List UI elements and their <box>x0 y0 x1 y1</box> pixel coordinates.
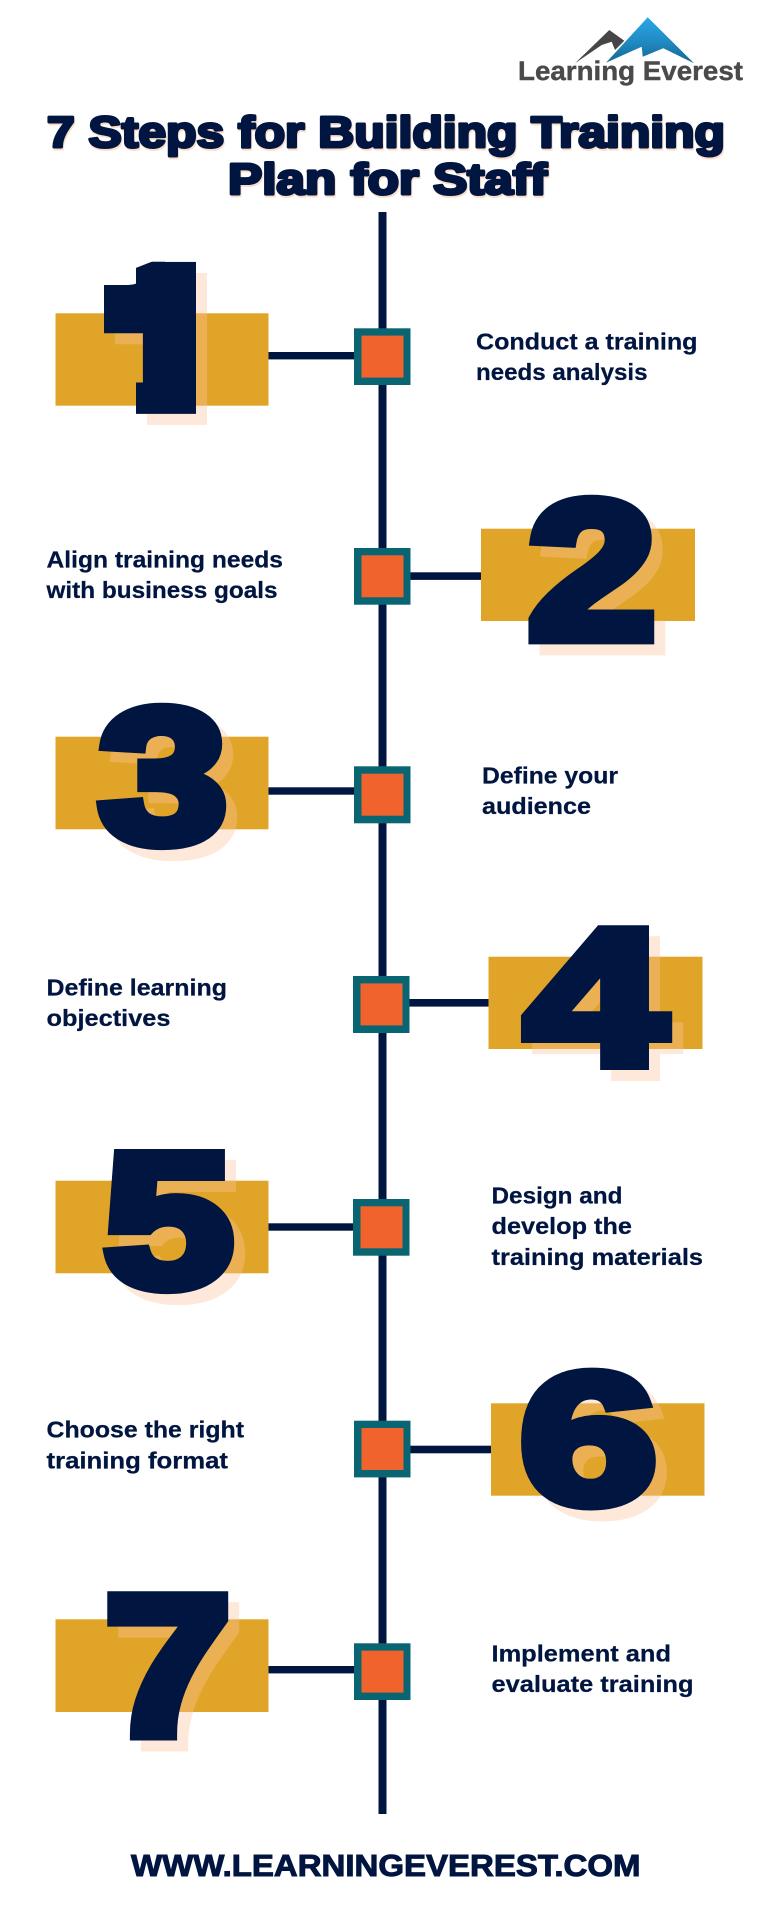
step 6 text: Choose the right <box>46 1416 244 1442</box>
logo wordmark: Learning Everest <box>518 56 743 86</box>
step 2 marker <box>354 548 410 605</box>
step 6 connector <box>410 1446 491 1453</box>
step 4 text: Define learning <box>46 974 227 1000</box>
step 1 text: Conduct a training <box>476 328 698 354</box>
step 5 text: training materials <box>492 1244 703 1270</box>
step 4 numeral: 4 <box>525 889 666 1105</box>
footer website: WWW.LEARNINGEVEREST.COM <box>131 1849 640 1883</box>
logo: Learning Everest <box>518 17 743 86</box>
step 1 numeral <box>104 262 207 425</box>
step 5 numeral: 5 <box>104 1114 233 1326</box>
step 6 text: training format <box>46 1447 228 1473</box>
title <box>47 109 725 204</box>
step 6 bar <box>491 1403 704 1496</box>
icon: grey mountain <box>575 30 624 63</box>
step 7 text: evaluate training <box>492 1671 694 1697</box>
step 1 <box>56 262 696 425</box>
step 7 marker <box>354 1643 410 1700</box>
step 2 numeral: 2 <box>528 462 656 680</box>
step 3 marker <box>354 766 410 823</box>
step 3 numeral: 3 <box>99 670 227 882</box>
step 2 text: Align training needs <box>46 546 283 572</box>
step 1 text: needs analysis <box>476 359 648 385</box>
step 5 marker <box>353 1199 410 1256</box>
title: 7 Steps for Building Training <box>47 109 725 157</box>
step 4 marker <box>353 976 410 1033</box>
step 7 numeral: 7 <box>105 1556 231 1777</box>
step 2 text <box>45 546 283 603</box>
step 5 connector <box>268 1223 354 1231</box>
step 7 text: Implement and <box>492 1640 671 1666</box>
timeline vertical line <box>378 212 386 1814</box>
step 3 text <box>482 762 618 819</box>
step 5 bar <box>56 1181 268 1273</box>
step 3 <box>56 670 618 882</box>
step 5 <box>56 1114 703 1326</box>
step 5 text <box>492 1182 703 1270</box>
step 6 marker <box>354 1421 410 1477</box>
step 3 text: Define your <box>482 762 618 788</box>
step 1 bar <box>56 313 268 406</box>
step 3 bar <box>56 737 268 829</box>
step 6 numeral: 6 <box>520 1336 657 1543</box>
step 4 text <box>46 974 227 1031</box>
step 7 connector <box>268 1666 354 1673</box>
step 2 bar <box>481 529 695 621</box>
step 5 text: Design and <box>492 1182 622 1208</box>
step 4 bar <box>488 957 702 1049</box>
step 1 marker <box>354 328 410 385</box>
step 1 numeral: 1 <box>72 223 261 453</box>
step 2 <box>45 462 695 680</box>
step 7 text <box>492 1640 694 1697</box>
step 4 text: objectives <box>46 1005 170 1031</box>
step 4 connector <box>409 999 488 1007</box>
step 1 text <box>476 328 698 385</box>
step 2 connector <box>410 572 481 580</box>
icon: blue mountain <box>606 17 694 63</box>
step 2 text: with business goals <box>45 577 278 603</box>
title: Plan for Staff <box>228 156 548 204</box>
step 7 bar <box>56 1619 268 1712</box>
step 3 text: audience <box>482 793 591 819</box>
step 5 text: develop the <box>492 1213 632 1239</box>
step 7 <box>56 1556 694 1777</box>
step 3 connector <box>268 787 354 795</box>
step 4 <box>46 889 702 1105</box>
step 6 text <box>46 1416 244 1473</box>
step 1 connector <box>268 352 354 359</box>
step 6 <box>46 1336 704 1543</box>
